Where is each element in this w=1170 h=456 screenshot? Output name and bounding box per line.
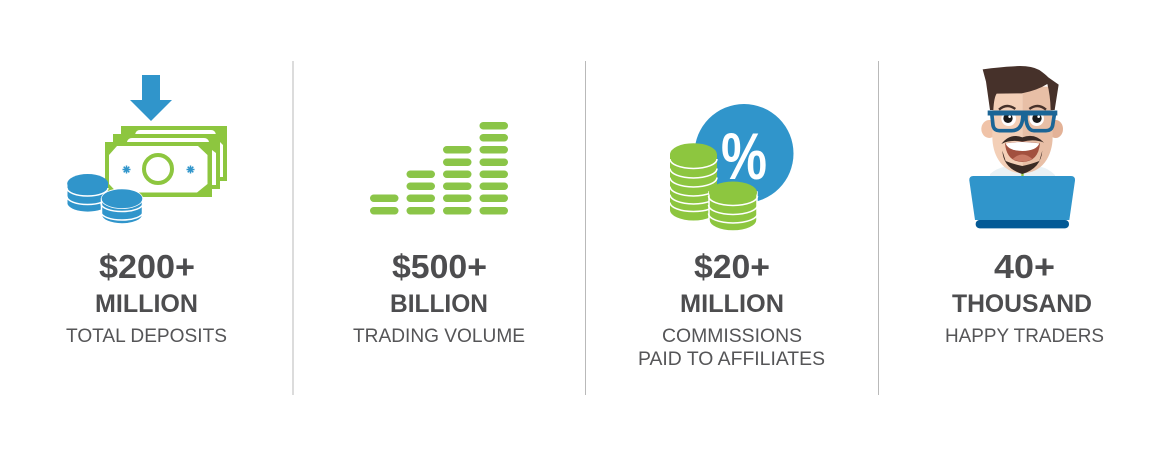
icon: green coins — [670, 143, 758, 231]
panel: trading volume — [353, 122, 525, 347]
panel: total deposits — [66, 75, 227, 347]
icon: blue coins — [67, 174, 143, 224]
heading: $200+: $200+ — [99, 248, 195, 285]
label: trading volume: TRADING VOLUME — [353, 325, 525, 347]
panel: commissions — [638, 104, 825, 370]
heading: 40+: 40+ — [994, 248, 1055, 285]
heading: million: MILLION — [95, 290, 198, 318]
label: paid to affiliates: PAID TO AFFILIATES — [638, 348, 825, 370]
heading: billion: BILLION — [390, 290, 488, 318]
icon: percent circle — [694, 104, 794, 203]
heading: thousand: THOUSAND — [952, 290, 1092, 318]
icon: banknotes — [105, 126, 227, 197]
label: happy traders: HAPPY TRADERS — [945, 325, 1104, 347]
panel: happy traders — [945, 66, 1104, 347]
heading: $20+: $20+ — [694, 248, 770, 285]
heading: million: MILLION — [680, 290, 784, 318]
icon: trader with laptop — [969, 66, 1075, 228]
icon: percent circle: % — [721, 119, 767, 193]
icon: down arrow — [130, 75, 172, 121]
heading: $500+: $500+ — [392, 248, 487, 285]
bar chart icon — [370, 122, 508, 214]
label: commissions: COMMISSIONS — [662, 325, 802, 347]
label: total deposits: TOTAL DEPOSITS — [66, 325, 227, 347]
